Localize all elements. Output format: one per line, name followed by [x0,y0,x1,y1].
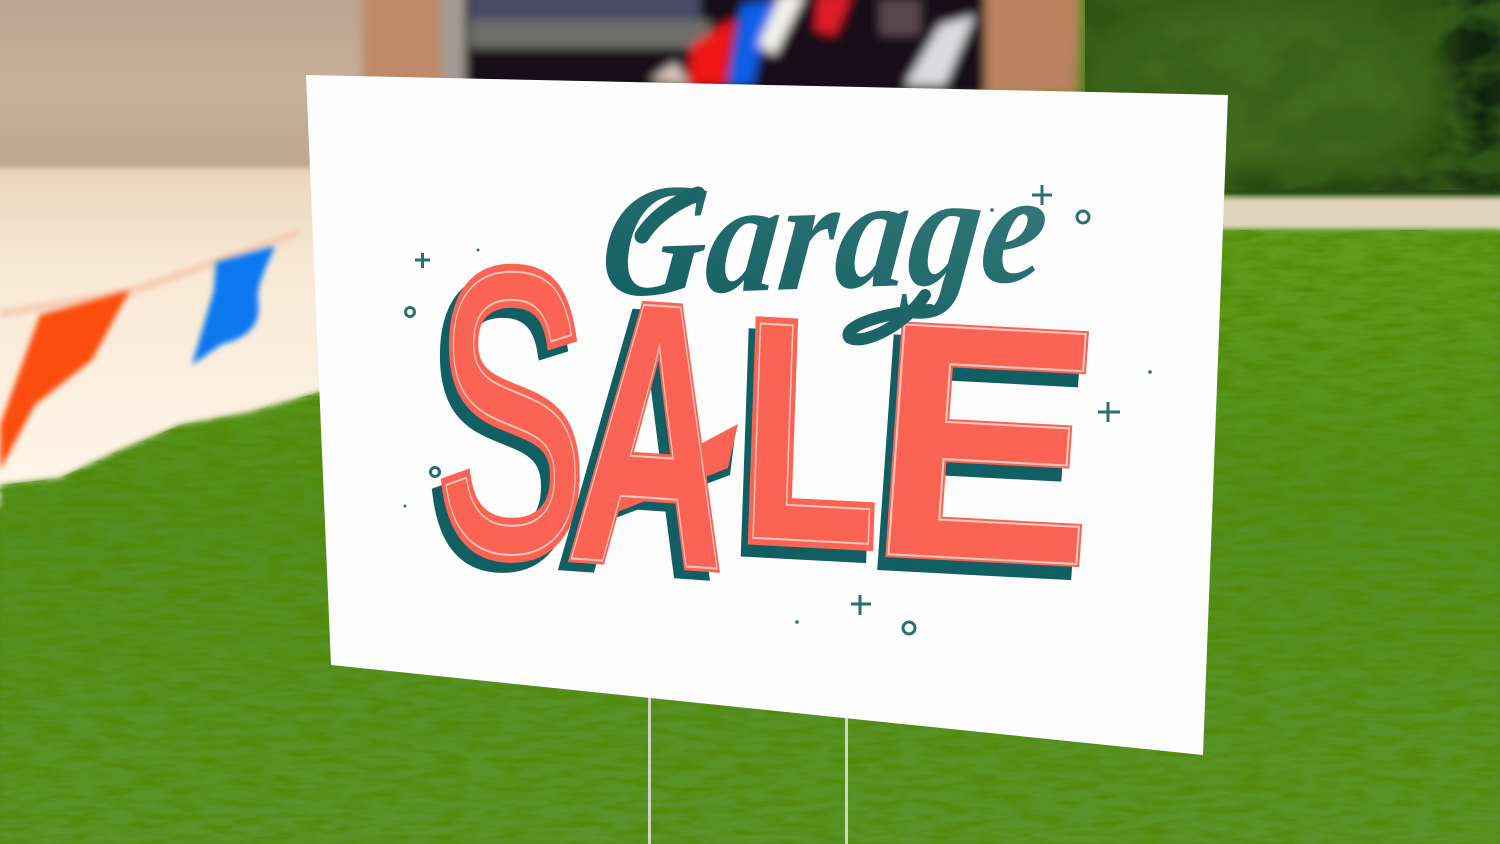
letter A: A [560,220,746,648]
metal stakes [648,695,848,844]
letter S: S [436,189,585,636]
letter E: E [861,251,1111,635]
letter S: S [427,199,576,646]
letter E: E [861,251,1111,635]
orange bunting flag [0,290,130,470]
swoosh: g descender loop [848,295,930,339]
letter A: A [560,220,746,648]
letter E: E [853,264,1103,648]
bunting string [0,232,300,314]
decorative plus marks [415,185,1120,615]
decorative rings [406,211,1089,634]
sign board [306,75,1228,755]
letter S: S [436,189,585,636]
blue bunting flag [192,246,275,365]
background: garage wall [0,0,380,172]
letter A: A [550,228,736,656]
letter L: L [729,267,878,623]
background: lawn [0,230,1500,844]
background: green hedge [1085,0,1500,200]
word: SALE [427,189,1111,656]
decorative dots [404,208,1152,624]
background: brick pillars and open garage [362,0,1080,95]
letter L: L [736,255,885,611]
word: Garage: Garage [593,138,1057,331]
swoosh: G top stroke [642,194,698,236]
background: gravel strip [1200,197,1500,231]
background: concrete driveway [0,168,340,508]
letter L: L [736,255,885,611]
